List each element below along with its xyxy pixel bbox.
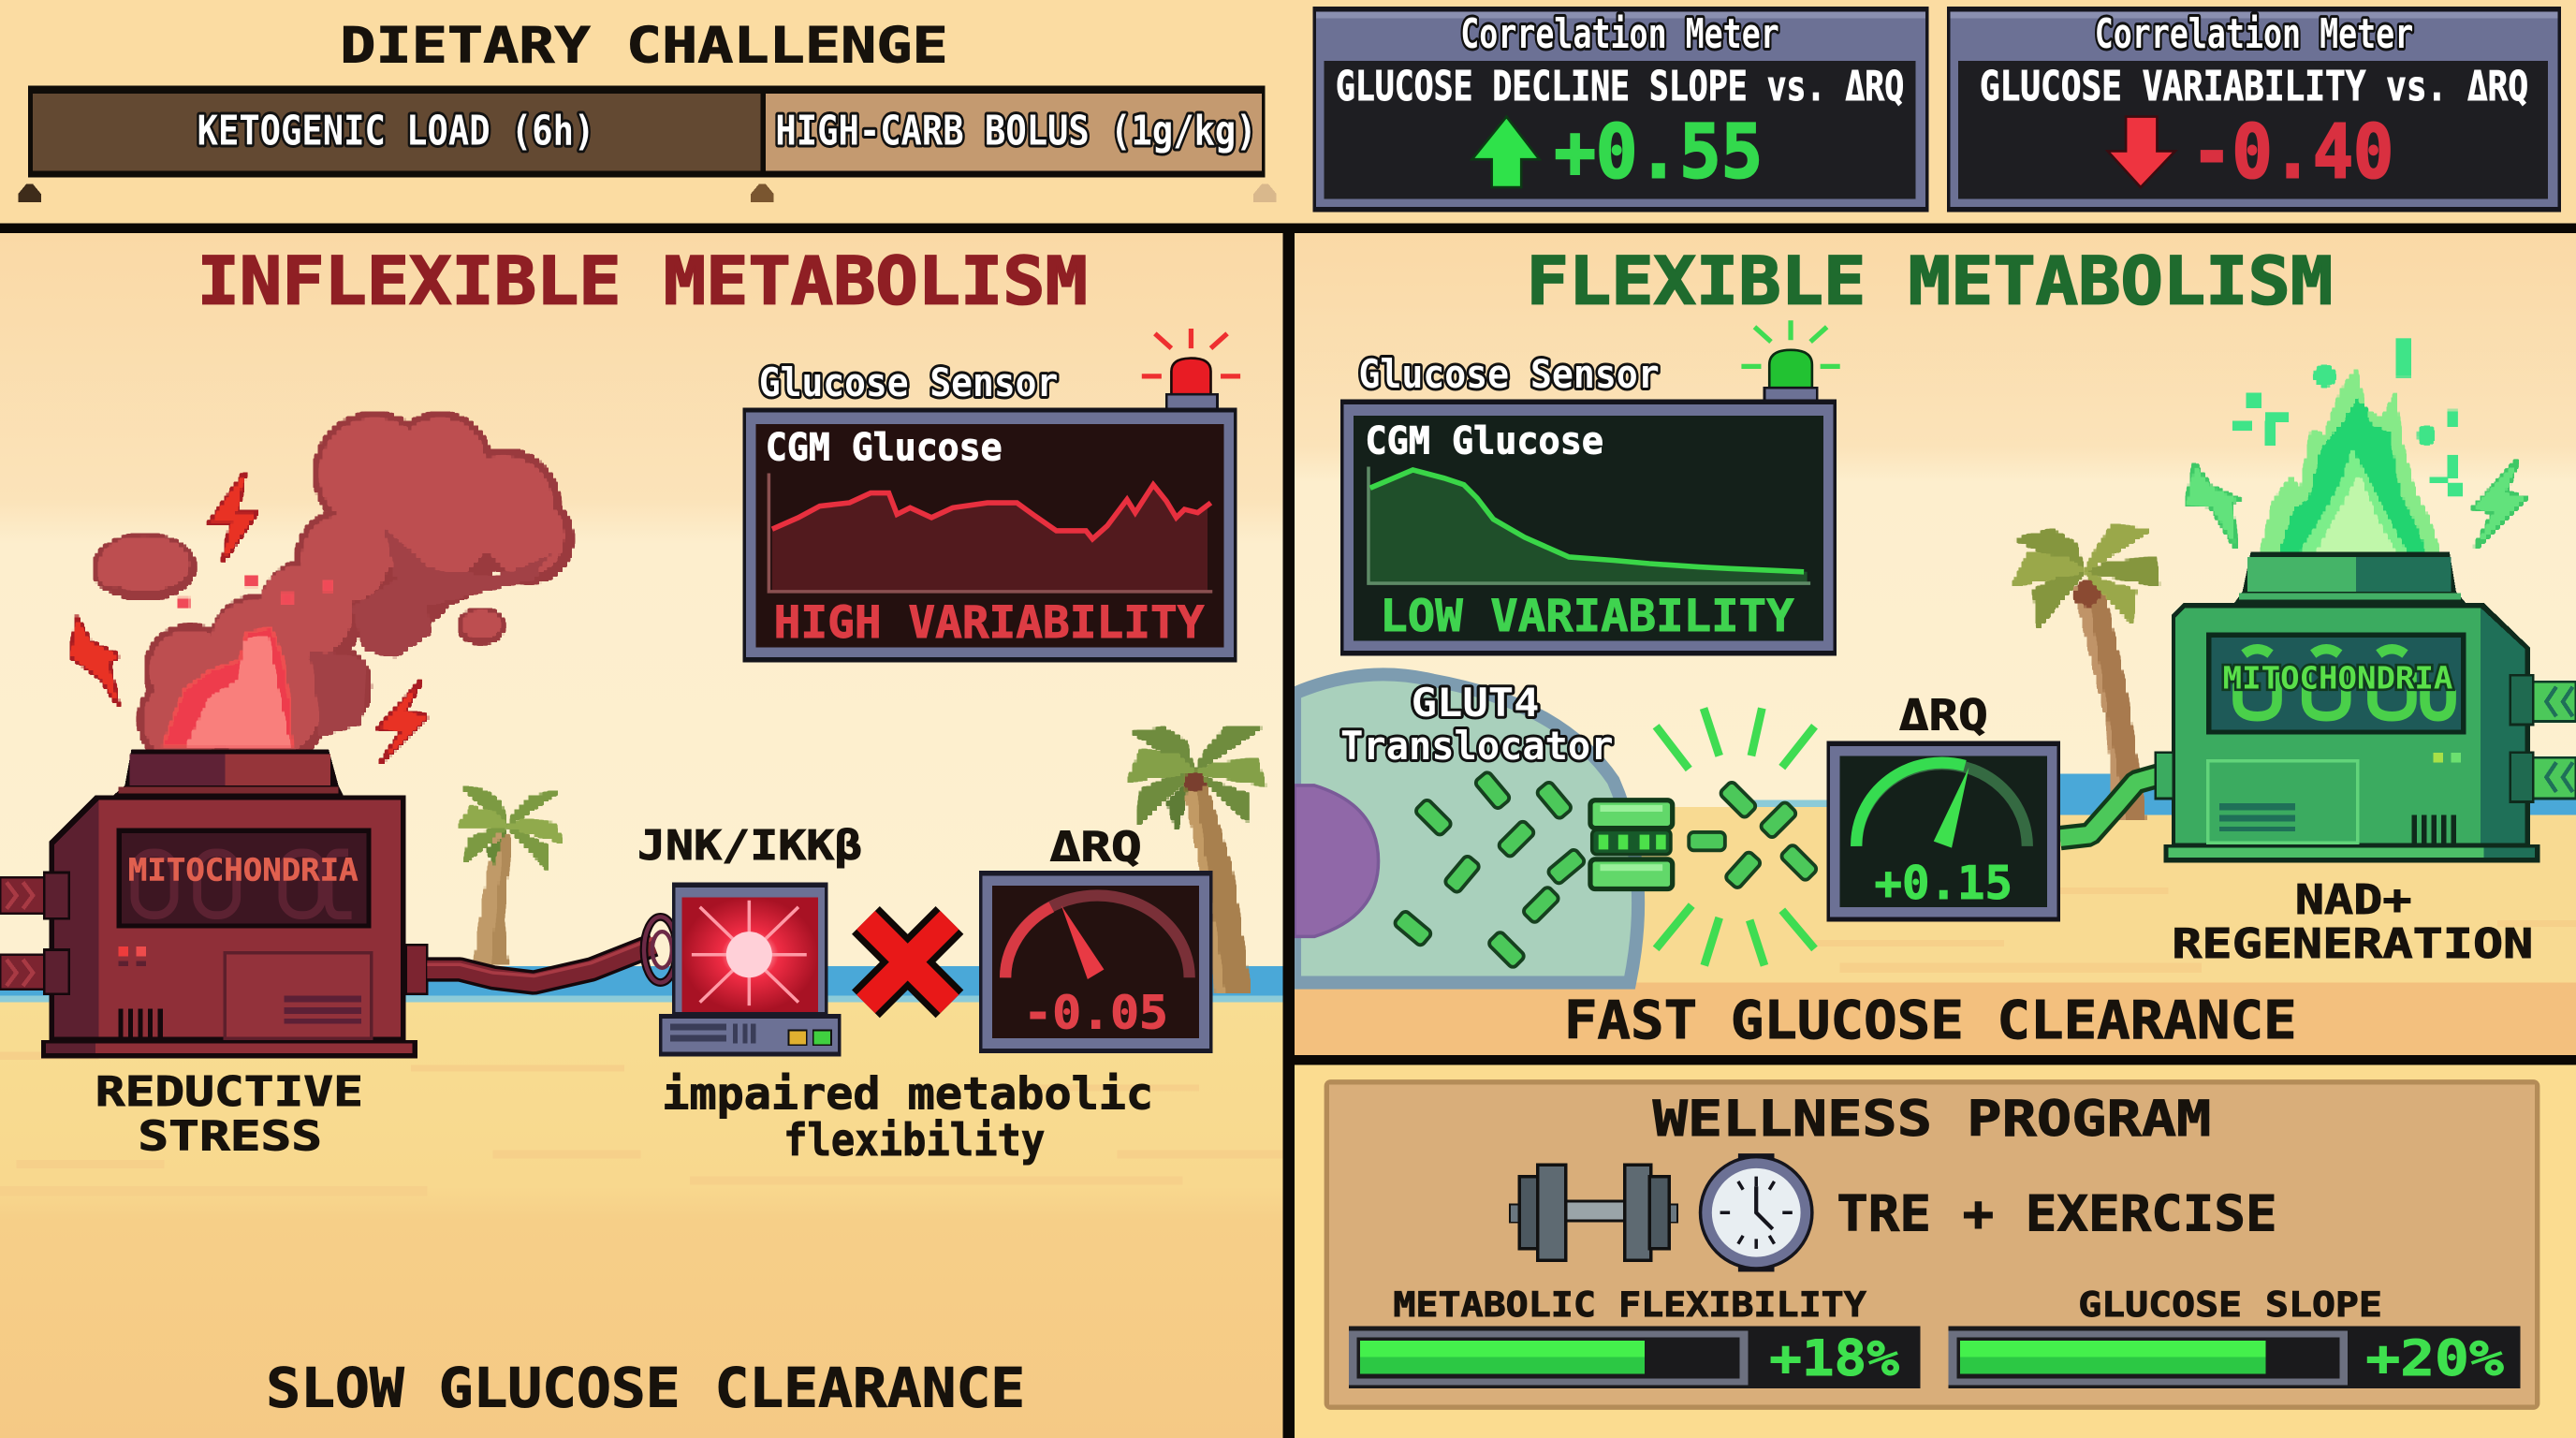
label: GLUT4 translocator: GLUT4: [1412, 680, 1540, 726]
gauge: delta RQ -0.05: [979, 871, 1212, 1053]
heading: wellness program: WELLNESS PROGRAM: [1653, 1091, 2211, 1148]
timeline tick markers: [18, 184, 1277, 202]
machine body: [50, 795, 406, 1042]
label: reductive stress: [95, 1068, 363, 1161]
gauge value: -0.05: [1023, 986, 1168, 1040]
label: high-carb bolus: HIGH-CARB BOLUS (1g/kg): [775, 107, 1257, 154]
chart line: [1370, 470, 1804, 572]
icon: up arrow: [1472, 117, 1540, 187]
progress bar: metabolic flexibility: [1349, 1326, 1921, 1388]
display label: mitochondria: MITOCHONDRIA: [128, 852, 359, 888]
icon: small palm tree: [459, 787, 564, 962]
door panel: [225, 953, 372, 1038]
label: sensor title: Glucose Sensor: [759, 360, 1058, 405]
sea: [0, 966, 1283, 1014]
clearance band: [1295, 983, 2576, 1057]
label: impaired metabolic flexibility: impaired metabolic: [662, 1069, 1153, 1121]
glucose sensor chart: high variability: [742, 407, 1237, 662]
lid: [113, 749, 344, 795]
label: delta RQ (red): ΔRQ: [1050, 824, 1142, 872]
chart label: HIGH VARIABILITY: [774, 597, 1205, 649]
icon: large palm tree: [1128, 728, 1266, 992]
label: glucose slope: GLUCOSE SLOPE: [2078, 1284, 2382, 1325]
display screen: [2206, 633, 2466, 735]
cable from gauge to machine: [2060, 775, 2159, 838]
top header background: [0, 0, 2576, 225]
lid: [2234, 552, 2466, 603]
kinase alarm device: [644, 882, 842, 1057]
meter subtitle: GLUCOSE DECLINE SLOPE vs. ΔRQ: [1336, 63, 1904, 110]
label: GLUT4 translocator: [1340, 680, 1614, 769]
base plinth: [2163, 844, 2539, 862]
segment: high-carb bolus: [766, 94, 1262, 171]
icon: green lightning bolts: [2187, 462, 2525, 547]
smoke cloud: [94, 413, 574, 768]
icon: lightning bolts: [70, 473, 427, 762]
pipes: [2510, 682, 2576, 721]
nucleus: [1295, 785, 1379, 936]
correlation meter panel: glucose decline slope: [1312, 7, 1928, 212]
label: GLUT4 translocator: Translocator: [1340, 723, 1614, 769]
value +20%: +20%: [2365, 1330, 2504, 1387]
heading: inflexible metabolism: INFLEXIBLE METABOLISM: [198, 243, 1088, 320]
chart area: [1370, 470, 1808, 583]
gauge value: +0.15: [1875, 856, 2012, 910]
icon: green alarm beacon: [1741, 320, 1840, 401]
label: JNK/IKKb: JNK/IKKβ: [637, 822, 862, 870]
icon: clock: [1699, 1153, 1814, 1271]
machine: mitochondria (red): [0, 749, 427, 1058]
LEDs: [2433, 753, 2443, 762]
meter title: Correlation Meter: [2095, 10, 2413, 58]
dietary timeline bar: [28, 85, 1265, 178]
display label: mitochondria: MITOCHONDRIA: [2223, 659, 2452, 696]
cable to kinase box: [427, 938, 654, 983]
label: delta RQ (green): ΔRQ: [1899, 690, 1988, 740]
gauge: delta RQ +0.15: [1827, 741, 2060, 922]
vents: [118, 1009, 163, 1036]
chart label: LOW VARIABILITY: [1380, 591, 1794, 642]
vents: [2411, 815, 2456, 843]
glowing digits on display: [2237, 649, 2452, 716]
label: reductive stress: REDUCTIVE: [95, 1068, 363, 1116]
flame: green: [2234, 340, 2463, 553]
value -0.40: -0.40: [2191, 110, 2393, 196]
panel: flexible metabolism: [1295, 233, 2576, 1057]
segment: ketogenic load: [33, 94, 761, 171]
label: metabolic flexibility: METABOLIC FLEXIBILITY: [1393, 1284, 1867, 1325]
icon: red alarm beacon: [1142, 329, 1240, 409]
label: TRE + exercise: TRE + EXERCISE: [1837, 1186, 2277, 1243]
icon: palm tree: [2012, 525, 2159, 820]
sea: [1827, 774, 2576, 818]
icon: dumbbell: [1510, 1165, 1677, 1260]
sand patches: [1808, 888, 2576, 973]
value +18%: +18%: [1769, 1330, 1899, 1387]
sky: [1295, 233, 2576, 825]
card: wellness program: [1325, 1079, 2539, 1410]
base plinth: [41, 1040, 417, 1058]
value +0.55: +0.55: [1554, 110, 1763, 196]
flame glow: [163, 627, 292, 746]
correlation meter panel: glucose variability: [1947, 7, 2561, 212]
chart line: [772, 485, 1211, 539]
glucose sensor chart: low variability: [1340, 399, 1837, 655]
connector: [406, 945, 427, 994]
door panel: [2208, 761, 2358, 843]
icon: red X: [866, 920, 949, 1004]
icon: down arrow: [2108, 117, 2175, 187]
cell with GLUT4: [1295, 674, 1673, 983]
label: NAD+ regeneration: NAD+: [2295, 876, 2411, 924]
sand: [1643, 807, 1827, 823]
radiating motion rays: [1656, 708, 1815, 965]
label: impaired metabolic flexibility: [662, 1069, 1153, 1167]
label: NAD+ regeneration: REGENERATION: [2172, 920, 2533, 968]
cell body: [1295, 674, 1638, 983]
sand patches: [0, 1051, 1283, 1196]
chart axes: [768, 473, 1212, 592]
ghost digits on display: [135, 853, 352, 916]
progress bar: glucose slope: [1949, 1326, 2520, 1388]
heading: dietary challenge: DIETARY CHALLENGE: [340, 18, 948, 75]
chart title: CGM Glucose: [1365, 418, 1603, 462]
chart title: CGM Glucose: [766, 425, 1003, 469]
machine body: [2172, 603, 2530, 846]
LEDs: [118, 946, 128, 956]
display screen: [117, 829, 372, 929]
heading: flexible metabolism: FLEXIBLE METABOLISM: [1526, 243, 2333, 320]
chart area: [772, 485, 1208, 592]
panel: wellness background: [1295, 1064, 2576, 1438]
glucose pills released: [1689, 781, 1818, 889]
label: reductive stress: STRESS: [138, 1113, 322, 1161]
meter title: Correlation Meter: [1460, 10, 1779, 58]
pipe flanges: [2510, 675, 2533, 725]
GLUT4 transporter: [1590, 800, 1673, 889]
connector: [2156, 753, 2174, 799]
sand: [0, 1003, 1283, 1438]
heading: slow glucose clearance: SLOW GLUCOSE CLEARANCE: [266, 1356, 1025, 1419]
chart axes: [1368, 466, 1810, 583]
label: sensor title: Glucose Sensor: [1358, 351, 1660, 397]
label: impaired metabolic flexibility: flexibility: [783, 1115, 1045, 1167]
label: ketogenic load: KETOGENIC LOAD (6h): [198, 107, 594, 154]
heading: fast glucose clearance: FAST GLUCOSE CLEARANCE: [1564, 990, 2297, 1051]
panel: inflexible metabolism: [0, 233, 1283, 1438]
pipes: [0, 877, 54, 914]
glucose pills inside cell: [1393, 770, 1586, 969]
sky: [0, 233, 1283, 973]
machine: mitochondria (green): [2156, 552, 2576, 862]
label: NAD+ regeneration: [2172, 876, 2533, 968]
pipe flanges: [44, 873, 69, 918]
